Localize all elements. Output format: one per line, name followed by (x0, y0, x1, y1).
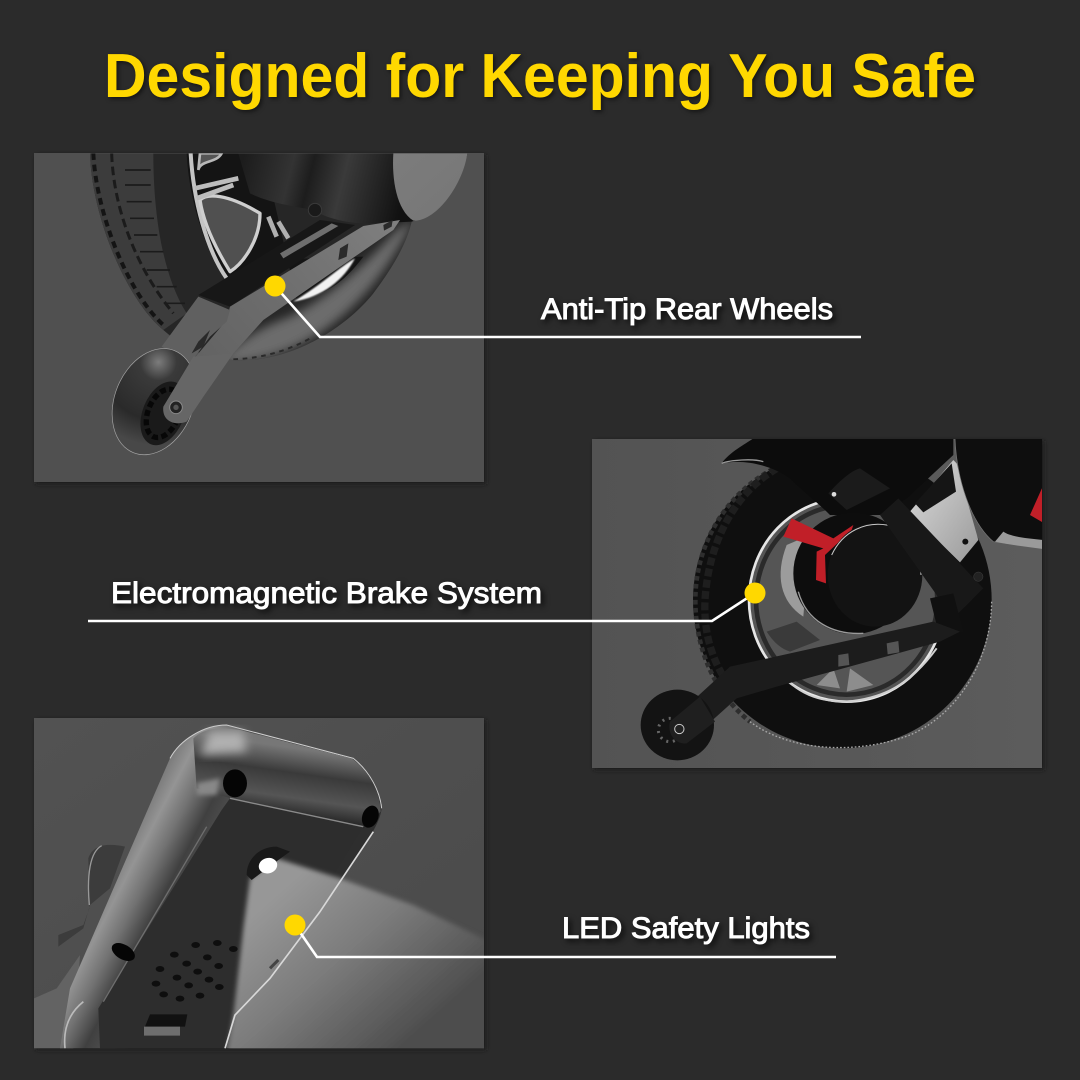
motor end cap (838, 530, 922, 626)
motor housing (793, 515, 887, 634)
dark back face (98, 798, 363, 1048)
bracket (880, 498, 983, 622)
anti-tip arm (698, 622, 960, 719)
panel: led safety lights photo (34, 718, 490, 1055)
top bevel (193, 728, 381, 828)
small anti-tip wheel (641, 690, 715, 760)
callout: anti-tip rear wheels (264, 276, 861, 337)
alloy rim (749, 498, 944, 702)
callout: led safety lights (284, 912, 836, 957)
device body (60, 725, 382, 1048)
left tail (34, 955, 80, 1048)
callout: electromagnetic brake system (88, 577, 766, 621)
red brake lever (783, 518, 853, 583)
leader line (275, 286, 861, 337)
charging port (144, 1014, 187, 1036)
label: Anti-Tip Rear Wheels (541, 293, 833, 326)
small anti-tip wheel (112, 348, 196, 456)
light beam (227, 858, 490, 1055)
title: Designed for Keeping You Safe (104, 42, 976, 111)
led lamp (247, 847, 290, 880)
marker dot (264, 276, 286, 296)
red detail (1030, 488, 1042, 522)
panel: electromagnetic brake system photo (592, 438, 1044, 770)
fender (722, 438, 953, 515)
panel: anti-tip rear wheels photo (34, 150, 486, 484)
rear wheel tire (693, 452, 992, 748)
anti-tip arm (198, 220, 355, 307)
label: LED Safety Lights (562, 912, 810, 945)
marker dot (284, 914, 306, 936)
screw holes (109, 769, 382, 965)
rear shield (955, 438, 1043, 548)
device edge highlight (225, 832, 373, 1048)
silver frame plate (909, 460, 978, 562)
tire tread (90, 153, 187, 330)
leader line (88, 593, 755, 621)
label: Electromagnetic Brake System (111, 577, 542, 610)
rear wheel tire (90, 154, 412, 360)
motor end cap (393, 153, 467, 221)
speaker grille (152, 940, 238, 1002)
rear handle (58, 845, 125, 947)
marker dot (744, 582, 766, 604)
alloy rim (187, 153, 363, 300)
leader line (295, 925, 836, 957)
motor body (238, 153, 467, 224)
